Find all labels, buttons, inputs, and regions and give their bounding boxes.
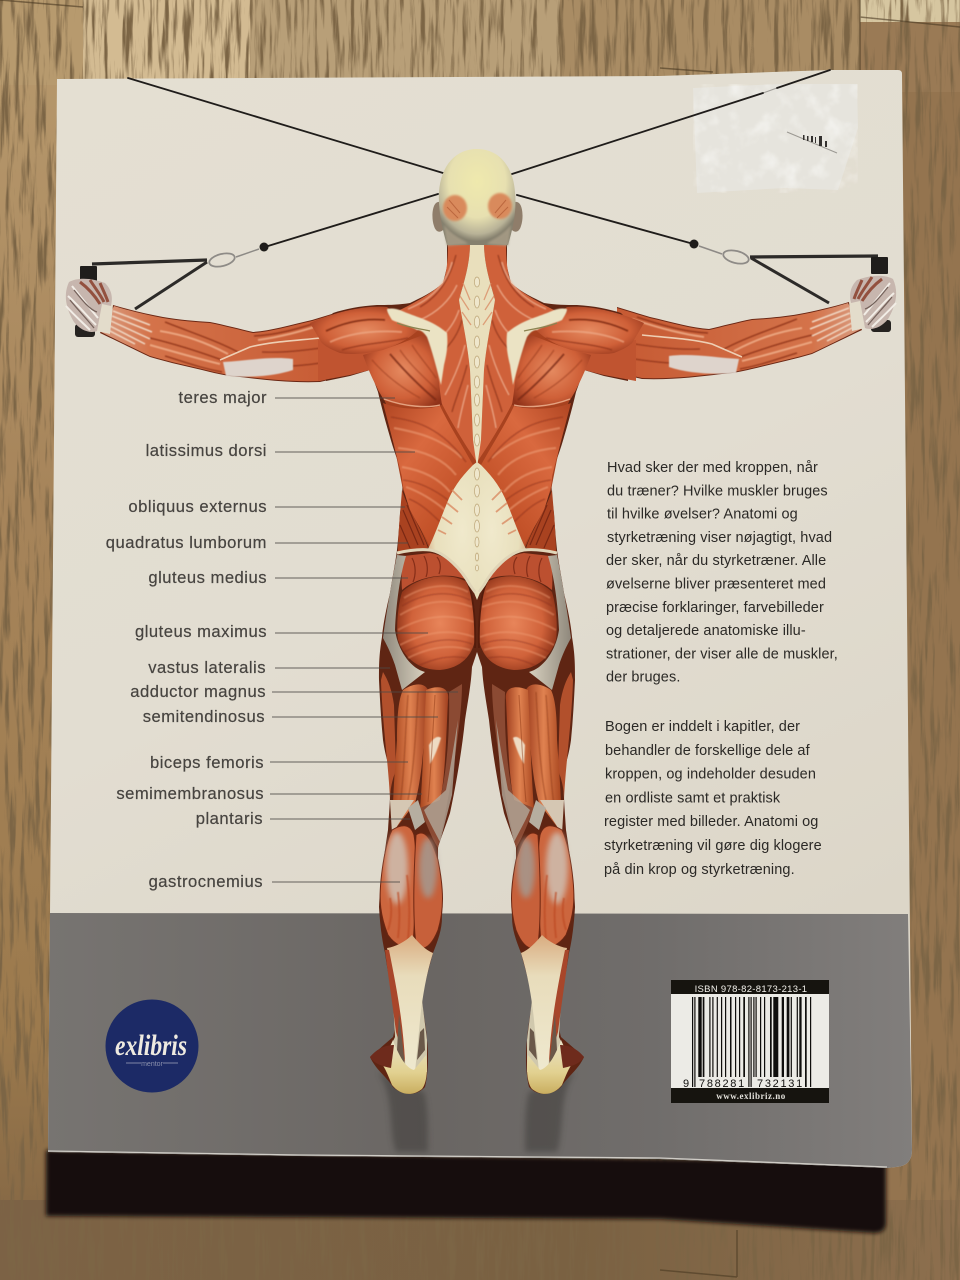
heel [382, 1040, 427, 1094]
figure reflections on floor [378, 1072, 575, 1152]
body text paragraph 2: behandler de forskellige dele af [605, 743, 811, 759]
gluteus maximus [397, 576, 475, 670]
body text paragraph 2 [604, 719, 822, 878]
torso muscle underlay [372, 295, 477, 550]
body text paragraph 1: og detaljerede anatomiske illu- [606, 623, 806, 639]
body text paragraph 1: præcise forklaringer, farvebilleder [606, 600, 824, 616]
ISBN barcode block: ISBN 978-82-8173-213-1 [695, 984, 807, 995]
body text paragraph 1: du træner? Hvilke muskler bruges [607, 483, 828, 499]
ISBN barcode block: 9 [683, 1078, 689, 1090]
silhouette [326, 235, 477, 1094]
labels: muscle names: obliquus externus [128, 497, 267, 516]
ears [432, 202, 523, 232]
labels: muscle names: quadratus lumborum [106, 533, 267, 552]
labels: muscle names: teres major [178, 388, 267, 407]
hand [66, 279, 112, 332]
lumbar fascia [428, 462, 477, 600]
labels: muscle names: adductor magnus [130, 682, 266, 701]
labels: muscle names: plantaris [196, 809, 263, 828]
labels: muscle names: gastrocnemius [149, 872, 263, 891]
body text paragraph 1: strationer, der viser alle de muskler, [606, 646, 838, 662]
labels: muscle names [106, 388, 458, 891]
labels: muscle names: latissimus dorsi [146, 441, 267, 460]
knee tendons [390, 800, 414, 834]
body text paragraph 1: til hvilke øvelser? Anatomi og [607, 507, 798, 523]
right arm and hand (mirrored) [617, 276, 896, 379]
labels: muscle names: semimembranosus [116, 784, 264, 803]
sticker residue [693, 84, 858, 193]
barcode bars [692, 997, 811, 1087]
body text paragraph 2: en ordliste samt et praktisk [605, 790, 781, 806]
vertebrae [474, 277, 480, 571]
head [432, 149, 523, 246]
labels: muscle names: gluteus maximus [135, 622, 267, 641]
ISBN barcode block [671, 980, 829, 1103]
ankle base [383, 1000, 427, 1072]
cables [128, 70, 830, 246]
body text paragraph 1: øvelserne bliver præsenteret med [606, 576, 826, 592]
body text paragraph 1: der sker, når du styrketræner. Alle [606, 553, 826, 569]
iliotibial band [383, 555, 425, 690]
vastus lateralis [381, 672, 396, 800]
body text paragraph 1: der bruges. [606, 670, 680, 686]
labels: muscle names: gluteus medius [148, 568, 267, 587]
labels: muscle names: biceps femoris [150, 753, 264, 772]
adductor magnus [420, 684, 462, 848]
gluteus medius [402, 553, 467, 590]
body text paragraph 1 [606, 460, 838, 686]
latissimus dorsi [383, 403, 473, 547]
labels: muscle names: semitendinosus [143, 707, 265, 726]
book back cover [48, 70, 912, 1168]
obliquus externus [398, 490, 428, 553]
peroneal muscles [385, 950, 405, 1062]
right half of body (mirrored) [477, 235, 644, 1094]
cable handle right [690, 240, 891, 332]
left half of body [310, 235, 477, 1094]
body text paragraph 1: Hvad sker der med kroppen, når [607, 460, 818, 476]
trapezius [396, 245, 477, 462]
ISBN barcode block: 788281 [699, 1078, 746, 1090]
ISBN barcode block: www.exlibriz.no [716, 1091, 786, 1101]
wrist band [97, 303, 113, 334]
body text paragraph 2: på din krop og styrketræning. [604, 862, 795, 878]
labels: muscle names: vastus lateralis [148, 658, 266, 677]
deltoid [310, 307, 420, 354]
gastrocnemius outer head [380, 826, 416, 947]
body text paragraph 2: kroppen, og indeholder desuden [605, 767, 816, 783]
dark shadow band under book [46, 1150, 886, 1233]
cable handle left [75, 242, 268, 337]
body text paragraph 2: styrketræning vil gøre dig klogere [604, 838, 822, 854]
semitendinosus [420, 687, 448, 810]
body text paragraph 1: styrketræning viser nøjagtigt, hvad [607, 530, 832, 546]
body text paragraph 2: register med billeder. Anatomi og [604, 814, 818, 830]
neck and spine tendon [459, 240, 477, 468]
publisher logo: exlibris [106, 1000, 198, 1092]
gastrocnemius inner head [414, 833, 442, 948]
publisher logo: exlibris: exlibris [115, 1029, 187, 1062]
foot [370, 1045, 394, 1068]
infraspinatus and teres [363, 333, 442, 408]
ISBN barcode block: 732131 [757, 1078, 804, 1090]
anatomical figure [66, 149, 896, 1094]
achilles tendon [387, 935, 433, 1072]
ankle tendons [397, 1013, 425, 1066]
biceps femoris [393, 684, 428, 832]
rear upper arm under deltoid [318, 340, 385, 400]
fascia band [397, 550, 475, 592]
body text paragraph 2: Bogen er inddelt i kapitler, der [605, 719, 800, 735]
shoulder tendon [387, 308, 447, 385]
left arm and hand [66, 279, 345, 382]
publisher logo: exlibris: mentor [141, 1061, 164, 1068]
